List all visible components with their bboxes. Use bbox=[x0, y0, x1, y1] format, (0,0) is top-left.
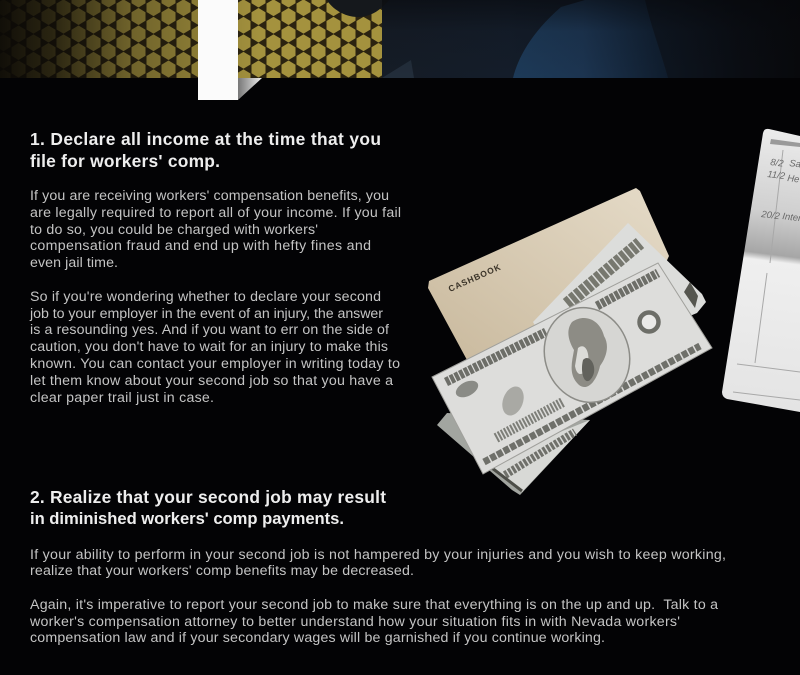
text block: section 2 paragraph 2 bbox=[29, 597, 718, 646]
bill denomination numerals bbox=[453, 377, 481, 401]
ledger handwriting bbox=[760, 157, 800, 224]
cashbook label: CASHBOOK bbox=[447, 262, 503, 294]
main bill bbox=[432, 263, 712, 474]
text block: section 1 paragraph 2: is a resounding yes. And if you want to err on the side of bbox=[30, 322, 389, 338]
text block: section 2 paragraph 1: If your ability to perform in your second job is not hampered by your injuries and you wish to keep working, bbox=[30, 547, 726, 563]
text block: section 1 paragraph 2: known. You can contact your employer in writing today to bbox=[30, 356, 400, 372]
ledger column lines bbox=[733, 150, 800, 400]
bill bottom ornament bbox=[484, 346, 700, 462]
heading: section 1: 1. Declare all income at the time that you bbox=[30, 129, 381, 149]
text block: section 1 paragraph 1: to do so, you could be charged with workers' bbox=[30, 222, 318, 238]
text block: section 1 paragraph 2: let them know about your second job so that you have a bbox=[30, 373, 393, 389]
ledger handwriting: 20/2 bbox=[760, 209, 781, 222]
bill lower scrollwork bbox=[496, 402, 563, 438]
text block: section 1 paragraph 1: are legally required to report all of your income. If you fail bbox=[30, 205, 401, 221]
white ribbon with folded corner bbox=[198, 0, 262, 100]
text block: section 1 paragraph 1: compensation fraud and end up with hefty fines and bbox=[30, 238, 371, 254]
heading: section 1 bbox=[30, 129, 381, 171]
image: cashbook with dollar bills bbox=[428, 188, 712, 495]
text block: section 2 paragraph 1 bbox=[30, 547, 726, 579]
bottom bill bbox=[437, 413, 590, 495]
cashbook cover bbox=[428, 188, 669, 360]
text block: section 2 paragraph 2: Again, it's imperative to report your second job to make sure that everything is on the up and up. Talk to a bbox=[30, 597, 718, 613]
heading: section 2: in diminished workers' comp payments. bbox=[30, 509, 344, 528]
rear bill bbox=[533, 223, 706, 370]
text block: section 1 paragraph 1: even jail time. bbox=[30, 255, 118, 271]
text block: section 2 paragraph 1: realize that your workers' comp benefits may be decreased. bbox=[30, 563, 414, 579]
text block: section 1 paragraph 2: job to your employer in the event of an injury, the answer bbox=[29, 306, 383, 322]
ledger handwriting: 11/2 bbox=[767, 169, 786, 182]
top photo: person in denim against a honeycomb wall bbox=[0, 0, 800, 78]
bill top ornament bbox=[446, 273, 658, 382]
text block: section 1 paragraph 2: clear paper trail just in case. bbox=[30, 390, 214, 406]
heading: section 1: file for workers' comp. bbox=[30, 151, 220, 171]
text block: section 1 paragraph 2: So if you're wondering whether to declare your second bbox=[30, 289, 381, 305]
text block: section 1 paragraph 2: caution, you don't have to wait for an injury to make this bbox=[30, 339, 388, 355]
ledger handwriting: 8/2 bbox=[770, 157, 785, 170]
ledger handwriting: He bbox=[787, 173, 800, 185]
bill oval vignette bbox=[498, 383, 528, 419]
text block: section 1 paragraph 2 bbox=[29, 289, 400, 406]
heading: section 2: 2. Realize that your second job may result bbox=[30, 487, 386, 507]
text block: section 2 paragraph 2: compensation law and if your secondary wages will be garnished if you continue working. bbox=[30, 630, 605, 646]
heading: section 2 bbox=[30, 487, 386, 528]
text block: section 1 paragraph 1: If you are receiving workers' compensation benefits, you bbox=[30, 188, 389, 204]
ledger header strip bbox=[770, 139, 800, 147]
text block: section 1 paragraph 1 bbox=[30, 188, 401, 271]
text block: section 2 paragraph 2: worker's compensation attorney to better understand how your situation fits in with Nevada workers' bbox=[29, 614, 680, 630]
bill seal ring bbox=[640, 312, 658, 332]
bill portrait medallion bbox=[531, 296, 643, 414]
image: open ledger book bbox=[722, 129, 800, 412]
